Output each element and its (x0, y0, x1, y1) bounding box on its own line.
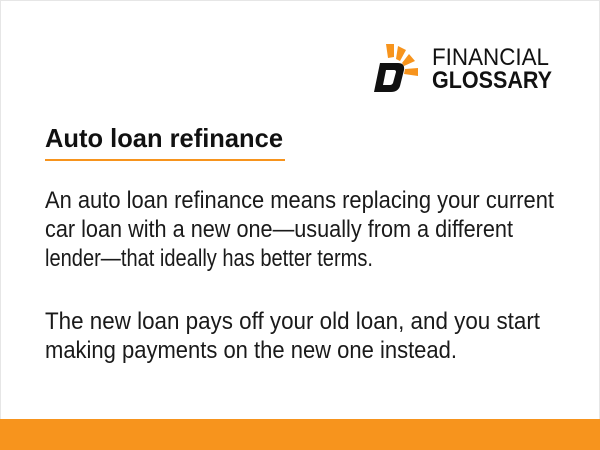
title: Auto loan refinance (45, 123, 283, 153)
body text: making payments on the new one instead. (45, 337, 457, 364)
icon: D with rays (374, 44, 418, 92)
body text: An auto loan refinance means replacing your current (45, 187, 554, 214)
title underline (45, 159, 285, 161)
logo: GLOSSARY (432, 67, 552, 94)
body text: lender—that ideally has better terms. (45, 245, 373, 272)
logo text: FINANCIAL (432, 44, 549, 71)
bottom band (0, 419, 600, 450)
body text: The new loan pays off your old loan, and you start (45, 308, 540, 335)
body text: car loan with a new one—usually from a different (45, 216, 513, 243)
body text (45, 187, 554, 364)
logo (374, 44, 552, 94)
